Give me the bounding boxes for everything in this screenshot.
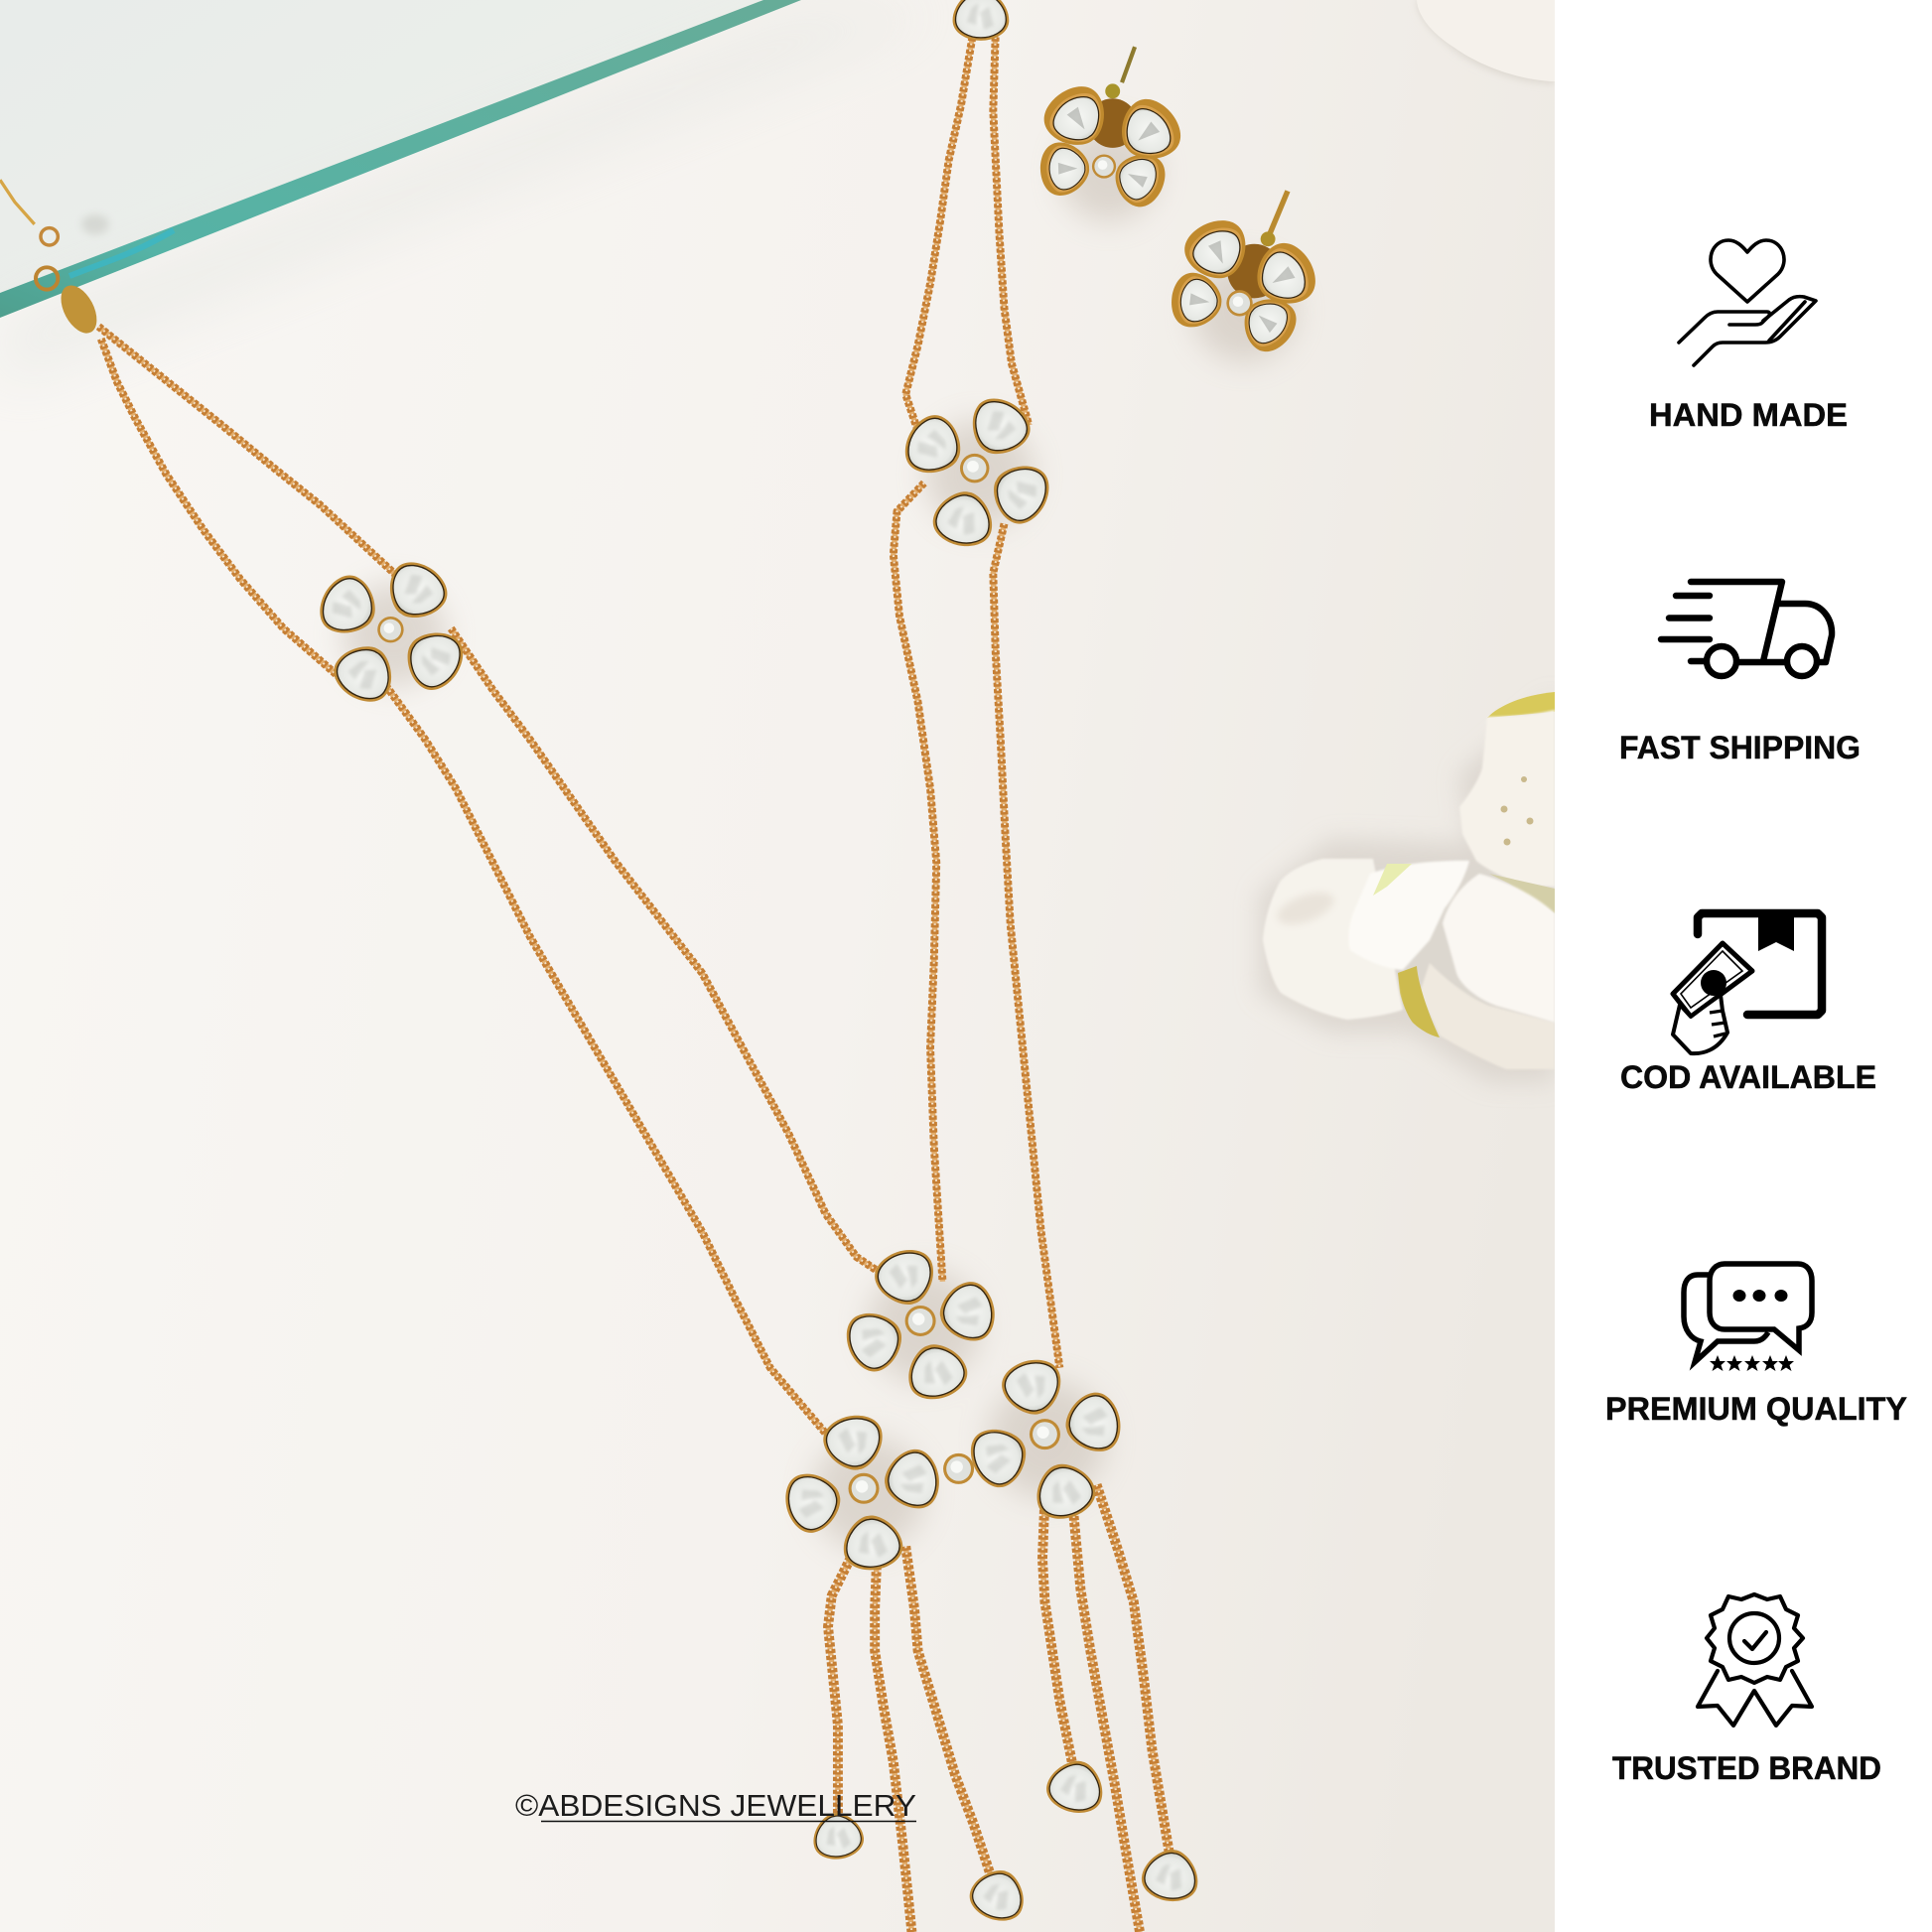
hand holding cash [1673,995,1727,1053]
necklace chains [98,31,1059,1448]
flower bottom petal [1420,963,1555,1069]
flower yellow edge [1487,692,1555,718]
glass edge: teal stripe [0,0,801,318]
flower motif: centre [838,1242,999,1407]
label: fast shipping: FAST SHIPPING [1619,730,1861,765]
flower: white cloth blossom [1259,692,1555,1082]
label: premium quality: PREMIUM QUALITY [1605,1391,1907,1427]
icon: trusted badge [1698,1594,1812,1725]
glass smudge [81,214,109,234]
hand fingers [1710,1011,1725,1036]
pendant: top centre stone [953,0,1009,41]
back bubble [1684,1275,1768,1362]
banknote [1673,943,1752,1017]
earring: lower [1169,191,1325,360]
icon: heart on hand [1679,240,1816,365]
panel: features column [1555,0,1932,1932]
flower: top right petal [1417,0,1555,83]
flower middle petal [1348,861,1469,970]
label: hand made: HAND MADE [1649,397,1848,433]
icon: premium quality chat [1684,1264,1812,1371]
flower upper petal [1459,710,1555,887]
banknote coin [1701,970,1726,996]
badge check [1744,1632,1766,1649]
connector stone [943,1453,974,1484]
badge circle [1729,1613,1779,1663]
flower motif: upper right [896,389,1058,551]
flower green highlight [1373,864,1412,896]
label: cod available: COD AVAILABLE [1620,1059,1876,1095]
copyright caption: ©ABDESIGNS JEWELLERY [515,1788,916,1823]
box outline [1698,913,1822,1015]
jewellery group in photo coordinates [0,0,1325,1932]
flower right petal [1443,874,1555,1023]
five stars [1710,1355,1794,1371]
jewellery shadows [343,123,1297,1550]
icon: cash on delivery [1673,913,1822,1053]
drop pendants [809,1754,1202,1928]
tassel chains [828,1485,1171,1932]
badge ribbons [1698,1671,1812,1725]
icon: fast shipping truck [1661,582,1832,676]
clasp with thin chain and rings [0,180,104,340]
stripe iridescent highlight [69,230,174,276]
glass shadow below the stripe [0,10,943,387]
flower holes [1501,776,1533,846]
banknote inner border [1681,951,1742,1008]
flower yellow stem [1398,966,1440,1037]
flower shaded gap [1489,874,1555,913]
box ribbon [1758,915,1794,951]
front bubble [1710,1264,1812,1350]
glass sheet above the stripe [0,0,801,294]
earring: upper [1035,47,1191,213]
badge rosette [1707,1594,1803,1683]
flower motif: upper left [311,552,473,711]
label: trusted brand: TRUSTED BRAND [1612,1750,1881,1786]
flower left petal [1263,859,1403,1020]
chat dots [1733,1290,1787,1302]
flower motif: lower right [962,1353,1126,1526]
flower motif: lower left [779,1410,943,1574]
flower left petal shade [1273,887,1338,930]
